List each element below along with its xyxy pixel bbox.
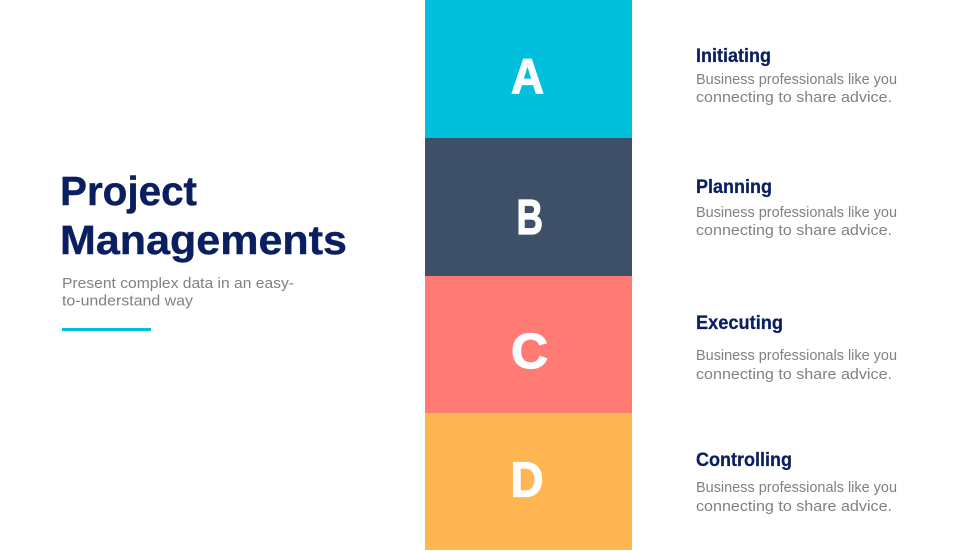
stage: Controlling: Controlling: [696, 450, 792, 471]
block B: B: [516, 191, 543, 245]
stage: Initiating: Initiating: [696, 46, 771, 67]
title: Project: [60, 168, 197, 214]
block D: [425, 413, 632, 550]
stage: Executing: [696, 313, 897, 383]
subtitle: [62, 275, 294, 310]
stage: Planning: Business professionals like you: [696, 204, 897, 221]
title: [60, 168, 347, 263]
block D: D: [510, 454, 544, 508]
stage: Controlling: Business professionals like you: [696, 479, 897, 496]
subtitle: to-understand way: [62, 292, 193, 310]
stage: Initiating: [696, 46, 897, 106]
stage: Controlling: [696, 450, 897, 515]
accent underline: [62, 328, 151, 331]
stage: Initiating: Business professionals like you: [696, 71, 897, 88]
panel: title block: [60, 168, 347, 331]
stage: Executing: Business professionals like you: [696, 347, 897, 364]
stage: Executing: Executing: [696, 313, 783, 334]
stage: Planning: [696, 177, 897, 239]
stage: Controlling: connecting to share advice.: [696, 498, 892, 515]
panel: letter column: [425, 0, 632, 550]
stage: Planning: connecting to share advice.: [696, 222, 892, 239]
stage: Initiating: connecting to share advice.: [696, 89, 892, 106]
block A: A: [511, 50, 544, 104]
subtitle: Present complex data in an easy-: [62, 275, 294, 292]
block B: [425, 138, 632, 276]
block A: [425, 0, 632, 138]
block C: C: [511, 325, 548, 379]
block C: [425, 276, 632, 413]
title: Managements: [60, 217, 347, 263]
stage: Planning: Planning: [696, 177, 772, 198]
panel: stage descriptions: [696, 46, 897, 515]
stage: Executing: connecting to share advice.: [696, 366, 892, 383]
